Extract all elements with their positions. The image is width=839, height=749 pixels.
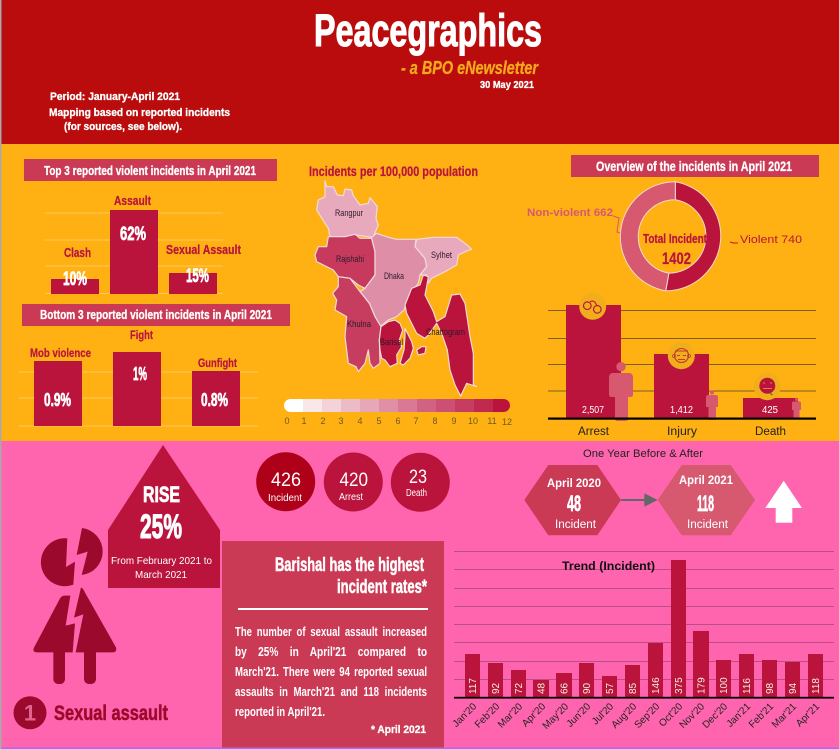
label: non-violent <box>527 207 620 233</box>
hexagon: April 2020 <box>524 465 621 535</box>
overview heading <box>571 155 819 177</box>
region: Rajshahi <box>315 234 375 288</box>
bar values: 146 <box>651 677 662 694</box>
colour scale legend: 10 <box>468 416 478 426</box>
hexagon: April 2020: Incident <box>555 519 597 531</box>
map labels: Rangpur <box>335 208 363 219</box>
panel: incidents map <box>284 163 512 427</box>
hexagon: April 2021: 118 <box>697 491 714 516</box>
title: Peacegraphics <box>314 5 542 56</box>
region: Sylhet <box>415 237 472 283</box>
bar: assault: Assault <box>114 193 152 208</box>
bar: fight: 1% <box>133 364 147 384</box>
icon: death face <box>754 373 781 400</box>
rise callout <box>108 445 220 588</box>
heading: top 3 <box>24 159 277 181</box>
bar: gunfight: Gunfight <box>198 356 237 370</box>
colour scale legend: 3 <box>338 416 344 426</box>
hexagon: April 2021: Incident <box>687 519 729 531</box>
bar values: 375 <box>674 677 685 694</box>
bar values: 66 <box>560 682 570 694</box>
mapping note <box>49 107 230 133</box>
body text: reported in April'21. <box>235 704 325 719</box>
stat: arrest: 420 <box>340 470 368 491</box>
map labels: Chattogram <box>426 327 465 338</box>
donut chart <box>620 182 721 291</box>
month labels: Apr'21 <box>794 701 822 729</box>
bar values: 117 <box>468 678 479 694</box>
body text <box>235 624 427 719</box>
bar: mob violence: Mob violence <box>30 346 91 360</box>
stat: death: 23 <box>409 467 427 488</box>
region: Khulna <box>333 277 381 372</box>
rise callout: 25% <box>140 508 182 546</box>
month labels: Jan'20 <box>451 701 479 730</box>
region: Dhaka <box>360 233 427 327</box>
map labels: Barisal <box>380 337 403 348</box>
map labels: Rajshahi <box>336 254 364 265</box>
bar values: 48 <box>536 682 548 694</box>
donut chart: Total Incident <box>643 232 708 246</box>
map labels: Sylhet <box>431 250 452 261</box>
bar: injury: 1,412 <box>670 405 693 416</box>
month labels: Mar'21 <box>770 701 799 731</box>
icon: injured face <box>668 342 695 369</box>
colour scale legend: 0 <box>284 416 290 426</box>
bar: death <box>743 373 801 438</box>
month labels: Apr'20 <box>520 701 548 729</box>
region: Rangpur <box>317 181 378 237</box>
header <box>49 5 542 133</box>
bar values: 92 <box>491 682 502 694</box>
panel heading <box>275 555 427 598</box>
bar: assault <box>110 193 158 294</box>
month labels: Mar'20 <box>496 701 525 731</box>
panel: top 3 incidents <box>24 159 277 294</box>
stat: arrest: Arrest <box>339 492 363 503</box>
map labels <box>335 208 465 348</box>
icon: person medium <box>706 390 718 420</box>
hexagon: April 2020: April 2020 <box>547 478 601 490</box>
bar values: 98 <box>765 682 776 694</box>
panel: overview <box>527 155 819 438</box>
map labels: Khulna <box>347 319 372 330</box>
bar: death: Death <box>755 426 786 438</box>
heading: top 3: Top 3 reported violent incidents in April 2021 <box>44 163 256 178</box>
bar: arrest: Arrest <box>578 426 610 438</box>
stat: incident <box>256 452 315 511</box>
icon: handcuffs <box>579 293 606 320</box>
island <box>417 347 426 355</box>
comparison heading: One Year Before & After <box>583 448 703 460</box>
month labels: Feb'21 <box>747 701 776 731</box>
bar: death: 425 <box>762 405 778 416</box>
stat: death <box>391 453 450 512</box>
colour scale legend: 1 <box>301 416 307 426</box>
category label: sexual assault: 1 <box>24 700 36 726</box>
colour scale legend: 4 <box>357 416 363 426</box>
donut chart: 1402 <box>662 249 691 268</box>
body text: March'21. There were 94 reported sexual <box>235 664 427 679</box>
region: Chattogram <box>405 275 477 396</box>
label: violent: Violent 740 <box>740 234 802 246</box>
bar values: 90 <box>582 682 593 694</box>
colour scale legend: 7 <box>413 416 419 426</box>
label: non-violent: Non-violent 662 <box>527 207 613 219</box>
stat: death: Death <box>406 488 427 499</box>
bar: assault: 62% <box>120 224 146 245</box>
hexagon: April 2020: 48 <box>567 491 581 516</box>
map of Bangladesh <box>315 181 477 396</box>
month labels: Jul'20 <box>590 701 616 727</box>
before and after comparison <box>524 448 802 535</box>
bar: clash <box>51 245 99 294</box>
colour scale legend: 11 <box>487 416 497 426</box>
colour scale legend: 6 <box>395 416 401 426</box>
bar values: 94 <box>788 682 799 694</box>
bar values: 72 <box>514 682 525 694</box>
rise callout: RISE <box>143 482 180 507</box>
icon: sexual assault broken figure <box>33 528 116 684</box>
date: 30 May 2021 <box>480 79 534 91</box>
heading: bottom 3 <box>22 304 290 326</box>
icon: person large <box>609 362 633 421</box>
bar: clash: Clash <box>64 245 91 260</box>
colour scale legend: 2 <box>320 416 326 426</box>
panel heading: incident rates* <box>337 577 427 598</box>
panel: bottom 3 incidents <box>19 304 290 426</box>
bar: mob violence: 0.9% <box>44 390 71 410</box>
month labels: Feb'20 <box>473 701 502 731</box>
trend bar chart <box>451 552 834 732</box>
icon: up arrow <box>765 481 802 523</box>
arrow: before to after <box>621 493 658 507</box>
rise callout: March 2021 <box>135 569 187 581</box>
map labels: Dhaka <box>384 271 405 282</box>
bar: gunfight: 0.8% <box>201 390 228 410</box>
bar: sexual assault: Sexual Assault <box>166 242 242 257</box>
colour scale legend: 5 <box>376 416 382 426</box>
bar values: 179 <box>696 677 708 694</box>
category label: sexual assault <box>14 696 168 729</box>
bar: sexual assault <box>166 242 242 294</box>
category label: sexual assault: Sexual assault <box>54 702 168 725</box>
bar: injury: Injury <box>667 426 697 438</box>
heading: bottom 3: Bottom 3 reported violent incidents in April 2021 <box>40 307 272 322</box>
month labels: May'20 <box>541 701 571 732</box>
month labels <box>451 701 822 732</box>
stat: incident: Incident <box>268 493 302 504</box>
period note: Period: January-April 2021 <box>50 91 180 103</box>
hexagon: April 2021: April 2021 <box>679 475 734 487</box>
rise callout: From February 2021 to <box>111 555 212 567</box>
bar values: 118 <box>811 678 822 694</box>
icon: person small <box>792 398 801 419</box>
bar: mob violence <box>30 346 91 426</box>
region: Barisal <box>379 320 413 367</box>
bar values: 100 <box>719 677 730 694</box>
bar values: 116 <box>742 678 753 694</box>
body text: The number of sexual assault increased <box>235 624 427 639</box>
mapping note: Mapping based on reported incidents <box>49 107 230 119</box>
stat: arrest <box>324 452 383 512</box>
colour scale legend: 12 <box>502 417 512 427</box>
month labels: Dec'20 <box>701 701 730 731</box>
stat: incident: 426 <box>271 470 301 491</box>
subtitle: - a BPO eNewsletter <box>401 58 539 78</box>
mapping note: (for sources, see below). <box>64 121 182 133</box>
colour scale legend: 9 <box>451 416 457 426</box>
bar: arrest: 2,507 <box>582 405 604 416</box>
bar values <box>468 677 822 694</box>
colour scale legend: 8 <box>432 416 438 426</box>
bar: arrest <box>566 293 633 438</box>
month labels: Oct'20 <box>657 701 685 729</box>
bar values: 57 <box>605 682 616 694</box>
bar values: 85 <box>628 682 639 694</box>
bar: fight: Fight <box>130 328 153 342</box>
month labels: Sep'20 <box>633 701 662 731</box>
footnote: * April 2021 <box>371 724 426 736</box>
bar: sexual assault: 15% <box>186 266 209 287</box>
month labels: Aug'20 <box>610 701 639 731</box>
body text: assaults in March'21 and 118 incidents <box>235 684 427 699</box>
bar: fight <box>113 328 161 426</box>
colour scale legend <box>284 399 512 427</box>
chart title: Trend (Incident) <box>562 561 655 573</box>
month labels: Jun'20 <box>565 701 593 730</box>
panel heading: Barishal has the highest <box>275 555 424 576</box>
body text: by 25% in April'21 compared to <box>235 644 427 659</box>
month labels: Jan'21 <box>725 701 753 730</box>
month labels: Nov'20 <box>678 701 707 731</box>
panel: Barishal text <box>222 541 444 748</box>
bar: clash: 10% <box>63 269 87 290</box>
bar: gunfight <box>192 356 240 426</box>
map heading: Incidents per 100,000 population <box>309 163 478 179</box>
bars <box>465 560 823 698</box>
hexagon: April 2021 <box>658 465 755 535</box>
bar: injury <box>654 342 718 438</box>
